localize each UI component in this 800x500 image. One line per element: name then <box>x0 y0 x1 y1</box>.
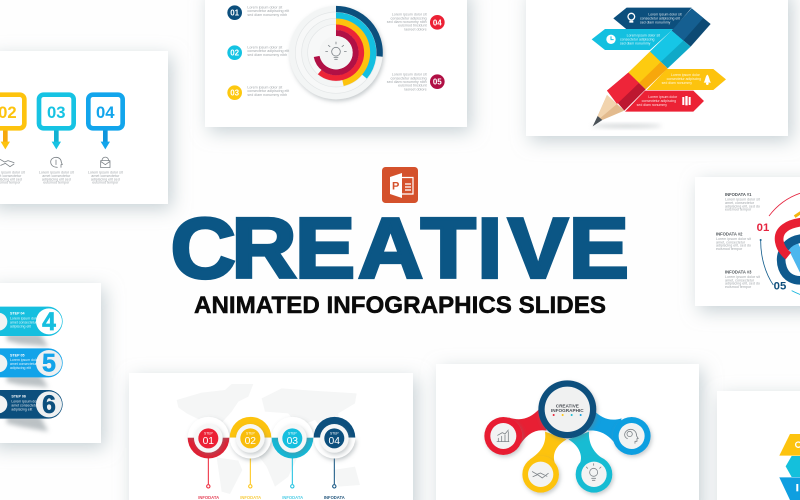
panel: creative infographic hub <box>436 364 699 500</box>
infodata 01 text: INFODATA #1 <box>725 192 752 197</box>
step 02: INFODATA <box>240 495 261 500</box>
caption text left: consectetur adipiscing elit <box>247 9 289 13</box>
icon: PowerPoint logo <box>382 167 418 203</box>
caption text left: sed diam nonummy nibh <box>247 53 287 57</box>
step 02 <box>230 417 271 500</box>
caption text left <box>247 6 289 97</box>
banner: red with people: Lorem ipsum dolor <box>648 95 678 99</box>
step 4 pill: Lorem ipsum dolor <box>10 316 40 320</box>
limb: red chart node <box>484 408 547 455</box>
number badge 05 <box>430 74 445 89</box>
step 04: INFODATA <box>324 495 345 500</box>
number badge 03: 03 <box>230 89 240 98</box>
infodata 03 text: euismod tempor <box>725 285 752 289</box>
number badge 04: 04 <box>433 18 442 27</box>
captions: Lorem ipsum dolor sit <box>88 171 123 175</box>
caption text left: Lorem ipsum dolor sit <box>247 46 282 50</box>
step 5 pill <box>0 348 63 378</box>
banner: cyan with clock <box>592 29 673 50</box>
blue chevron <box>779 477 800 500</box>
caption text left: consectetur adipiscing elit <box>247 89 289 93</box>
captions: euismod tempor <box>43 180 70 184</box>
number badge 04 <box>430 15 445 30</box>
step 4 pill <box>0 307 63 336</box>
pill shadows <box>7 333 48 432</box>
icon: handshake <box>0 159 14 167</box>
caption text left: consectetur adipiscing elit <box>247 49 289 53</box>
step 04: 04 <box>329 436 340 447</box>
coloured arc bands <box>317 9 380 83</box>
step 6 pill <box>0 390 63 419</box>
caption text right: consectetur adipiscing <box>390 16 427 20</box>
pin 04: 04 <box>96 103 115 122</box>
banner: yellow with bell <box>647 69 726 90</box>
centre disc with bulb icon <box>319 36 353 69</box>
infodata 03 text: INFODATA #3 <box>725 269 752 274</box>
infodata 01 text <box>725 192 760 212</box>
captions: euismod tempor <box>92 180 119 184</box>
captions: amet consectetur <box>91 174 120 178</box>
cyan chevron <box>786 456 800 477</box>
infodata 03 text <box>725 269 760 289</box>
concentric discs <box>289 6 383 99</box>
infodata 01 text: amet, consectetur <box>725 201 755 205</box>
step 4 pill: 4 <box>42 309 56 336</box>
step 01 <box>188 417 229 500</box>
caption text left: sed diam nonummy nibh <box>247 13 287 17</box>
infodata 02 text: Lorem ipsum dolor sit <box>716 237 751 241</box>
panel: numbered square pins <box>0 51 168 204</box>
limb: yellow handshake node <box>522 432 567 493</box>
infodata 01 text: euismod tempor <box>725 208 752 212</box>
step 6 pill: adipiscing elit <box>11 407 32 411</box>
infodata 02 text: adipiscing elit, sed do <box>716 244 751 248</box>
centre hub: INFOGRAPHIC <box>551 408 584 413</box>
step 6 pill: STEP 06 <box>11 395 26 399</box>
infodata 02 text: INFODATA #2 <box>716 231 743 236</box>
world map <box>177 384 360 494</box>
icon: PowerPoint logo: P <box>392 180 399 192</box>
step 5 pill: amet consectetur <box>10 362 38 366</box>
panel: hexagon stack, cropped <box>717 391 800 500</box>
infodata 02 text: euismod tempor <box>716 247 743 251</box>
centre hub: CREATIVE <box>556 404 579 409</box>
infodata 01 text: Lorem ipsum dolor sit <box>725 198 760 202</box>
caption text right: euismod tincidunt <box>398 24 427 28</box>
infodata 02 text: amet, consectetur <box>716 240 746 244</box>
banner: red with people <box>625 91 704 112</box>
caption text right: euismod tincidunt <box>398 84 427 88</box>
banner: red with people: consectetur adipiscing <box>642 99 676 103</box>
knot graphic <box>779 212 800 280</box>
infodata 03 text: amet, consectetur <box>725 278 755 282</box>
banner: red with people: sed diam nonummy <box>637 103 667 107</box>
limb: teal bulb node <box>568 432 612 493</box>
banner: navy with bulb: consectetur adipiscing elit <box>640 16 680 20</box>
subtitle: ANIMATED INFOGRAPHICS SLIDES <box>194 292 606 319</box>
banner: cyan with clock: sed diam nonummy <box>620 42 651 46</box>
banner: yellow with bell: Lorem ipsum dolor <box>671 73 701 77</box>
panel: numbered steps pills <box>0 283 101 443</box>
banner: cyan with clock: Lorem ipsum dolor sit <box>627 34 660 38</box>
icon: envelope <box>101 157 110 168</box>
number badge 02 <box>227 45 242 60</box>
captions <box>0 171 123 184</box>
step 4 pill: amet consectetur <box>10 320 38 324</box>
yellow chevron <box>779 434 800 456</box>
banner: yellow with bell: sed diam nonummy <box>662 81 692 85</box>
label 01: 01 <box>757 222 769 234</box>
step 4 pill: adipiscing elit <box>10 324 31 328</box>
step 02: STEP <box>246 431 255 435</box>
caption text right: consectetur adipiscing <box>390 76 427 80</box>
panel: concentric circle infographic <box>205 0 467 127</box>
limb: blue head node <box>588 410 651 455</box>
step 5 pill: STEP 05 <box>10 354 25 358</box>
step 03: 03 <box>287 436 298 447</box>
step 02: 02 <box>245 436 256 447</box>
caption text left: Lorem ipsum dolor sit <box>247 6 282 10</box>
step 01: INFODATA <box>198 495 219 500</box>
caption text right: Lorem ipsum dolor sit <box>392 73 427 77</box>
title: CREATIVE <box>171 201 629 296</box>
caption text right: Lorem ipsum dolor sit <box>392 13 427 17</box>
step 6 pill: Lorem ipsum dolor <box>11 399 41 403</box>
step 5 pill: Lorem ipsum dolor <box>10 358 40 362</box>
pencil shadow <box>592 124 662 128</box>
number badge 03 <box>227 85 242 100</box>
infodata 03 text: Lorem ipsum dolor sit <box>725 275 760 279</box>
step 04 <box>314 417 355 500</box>
number badge 02: 02 <box>230 49 240 58</box>
captions: Lorem ipsum dolor sit <box>39 171 74 175</box>
step 6 pill: 6 <box>42 392 56 419</box>
step 01: 01 <box>203 436 214 447</box>
banner: navy with bulb <box>613 8 692 29</box>
number badge 01: 01 <box>230 9 240 18</box>
caption text left: Lorem ipsum dolor sit <box>247 86 282 90</box>
infodata 01 text: adipiscing elit, sed do <box>725 204 760 208</box>
banner: cyan with clock: consectetur adipiscing <box>620 38 655 42</box>
banner: navy with bulb: sed diam nonummy <box>640 20 671 24</box>
step 03 <box>272 417 313 500</box>
infodata 03 text: adipiscing elit, sed do <box>725 282 760 286</box>
outer arcs <box>760 193 800 295</box>
pin 03: 03 <box>47 103 66 122</box>
banner: yellow with bell: consectetur adipiscing <box>667 77 701 81</box>
panel: world map timeline <box>129 373 413 500</box>
step 03: STEP <box>288 431 297 435</box>
caption text right: laoreet dolore <box>404 27 427 31</box>
pencil body <box>593 8 711 126</box>
centre hub <box>538 380 596 438</box>
captions: amet consectetur <box>42 174 71 178</box>
caption text right: sed diam nonummy nibh <box>387 80 427 84</box>
step 5 pill: 5 <box>42 351 56 378</box>
captions: adipiscing elit sed <box>42 177 71 181</box>
number badge 01 <box>227 5 242 20</box>
captions: adipiscing elit sed <box>91 177 120 181</box>
step 04: STEP <box>330 431 339 435</box>
caption text right <box>387 13 427 91</box>
number badge 05: 05 <box>433 78 442 87</box>
caption text right: sed diam nonummy nibh <box>387 20 427 24</box>
caption text right: laoreet dolore <box>404 87 427 91</box>
step 6 pill: amet consectetur <box>11 403 39 407</box>
step 01: STEP <box>204 431 213 435</box>
panel: pencil infographic <box>526 0 788 136</box>
banner: navy with bulb: Lorem ipsum dolor sit <box>648 12 682 16</box>
icon: head <box>51 157 62 167</box>
panel: circular infodata <box>695 177 800 306</box>
caption text left: sed diam nonummy nibh <box>247 93 287 97</box>
label 05: 05 <box>774 280 786 292</box>
step 5 pill: adipiscing elit <box>10 366 31 370</box>
step 03: INFODATA <box>282 495 303 500</box>
step 4 pill: STEP 04 <box>10 312 26 316</box>
infodata 02 text <box>716 231 751 251</box>
